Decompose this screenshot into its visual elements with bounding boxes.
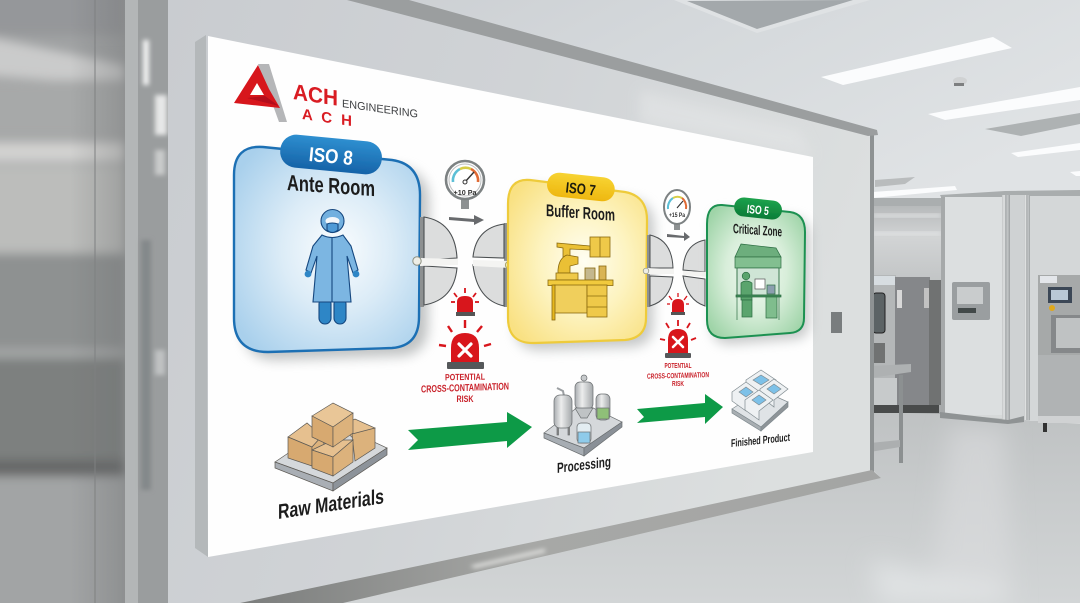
label: raw materials: Raw Materials <box>278 485 384 524</box>
door pair 1 <box>413 217 513 307</box>
ante room title: Ante Room <box>287 170 375 201</box>
label: finished product: Finished Product <box>731 432 790 450</box>
logo wordmark: ACH <box>293 79 338 111</box>
baseboard highlight <box>470 549 545 568</box>
panel: buffer room <box>508 172 654 350</box>
risk label 1 <box>421 372 509 404</box>
wall highlight under molding <box>640 90 813 157</box>
crown molding <box>347 0 878 136</box>
icon: gowned person <box>305 210 359 324</box>
risk label 2 <box>647 363 709 388</box>
ceiling lights <box>821 37 1080 198</box>
ISO 5 badge: ISO 5 <box>746 202 770 218</box>
back room through doorway <box>870 190 1080 420</box>
wall control panel <box>952 282 990 320</box>
risk label 1: POTENTIAL <box>445 372 485 382</box>
risk label 2: POTENTIAL <box>664 363 692 370</box>
alarm with cross 1 <box>439 320 491 369</box>
icon: raw materials pallet <box>275 403 387 491</box>
wall board <box>208 36 813 557</box>
icon: finished product stack <box>732 370 788 431</box>
left steel panels <box>0 0 168 603</box>
risk label 2: CROSS-CONTAMINATION <box>647 370 709 381</box>
wall corner trim <box>870 133 874 473</box>
logo engineering text: ENGINEERING <box>342 98 418 121</box>
alarm small 1 <box>451 288 479 316</box>
filling machine <box>1038 275 1080 432</box>
ISO 5 badge <box>733 197 783 220</box>
pressure gauge +15 Pa: +15 Pa <box>669 213 686 219</box>
icon: processing plant <box>544 375 622 456</box>
pressure gauge +10 Pa: +10 Pa <box>454 188 477 197</box>
buffer room title: Buffer Room <box>546 201 615 225</box>
process flow arrow 1 <box>408 412 532 450</box>
risk label 1: CROSS-CONTAMINATION <box>421 381 509 396</box>
ceiling sensor <box>953 77 967 86</box>
logo subtext: A C H <box>302 106 352 130</box>
process flow arrow 2 <box>637 394 723 424</box>
baseboard <box>240 470 881 603</box>
pressure flow arrow 2 <box>667 232 690 241</box>
logo <box>234 64 418 130</box>
door pair 2 <box>643 235 712 307</box>
wall switch <box>831 312 842 333</box>
pressure gauge +15 Pa <box>664 190 690 230</box>
ISO 8 badge: ISO 8 <box>308 144 354 170</box>
ISO 7 badge: ISO 7 <box>565 179 596 200</box>
critical zone title: Critical Zone <box>733 221 782 239</box>
ISO 8 badge <box>279 133 383 176</box>
alarm small 2 <box>667 293 689 315</box>
floor reflection <box>870 425 1012 603</box>
main wall <box>168 0 870 603</box>
alarm with cross 2 <box>660 320 696 358</box>
floor <box>343 412 1080 603</box>
pressure gauge +10 Pa <box>446 161 484 209</box>
panel: critical zone <box>707 197 810 344</box>
risk label 1: RISK <box>456 394 474 404</box>
steel table <box>870 364 911 463</box>
ISO 7 badge <box>546 172 616 202</box>
right wall pillar <box>940 195 1080 424</box>
label: processing: Processing <box>557 454 611 477</box>
risk label 2: RISK <box>672 381 684 388</box>
panel: ante room <box>234 133 429 360</box>
pressure flow arrow 1 <box>449 215 484 225</box>
ceiling <box>150 0 1080 240</box>
logo mark <box>234 64 287 122</box>
oven equipment <box>873 275 941 413</box>
icon: lab bench <box>548 237 613 320</box>
board side <box>195 35 208 557</box>
icon: laminar flow hood <box>735 244 781 320</box>
